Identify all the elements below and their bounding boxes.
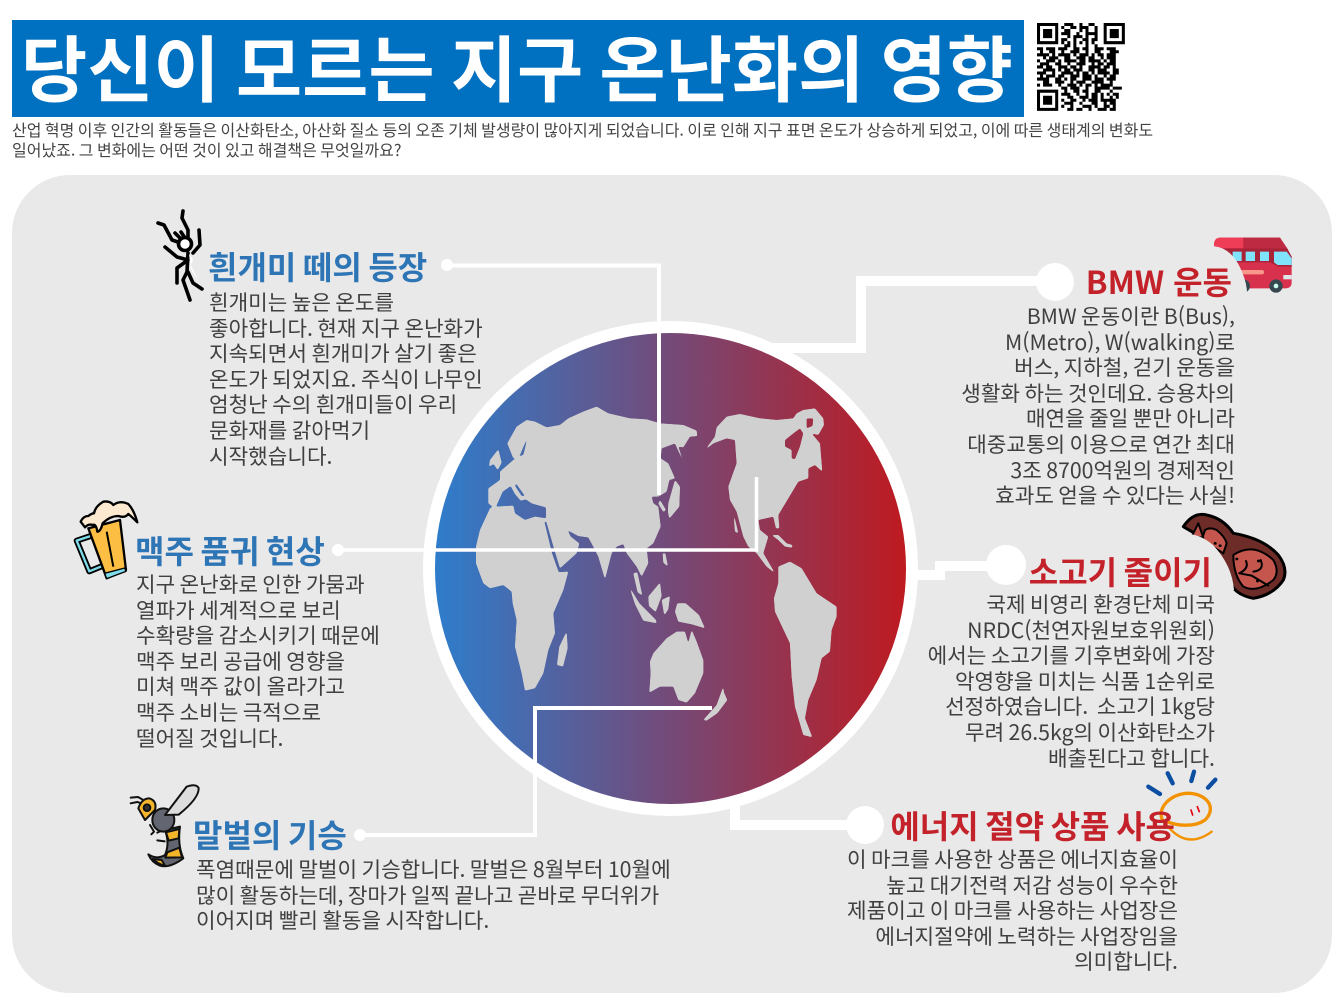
heading: beer: 맥주 품귀 현상 <box>135 527 325 573</box>
connector: hornet <box>354 708 712 841</box>
world map <box>476 407 837 737</box>
connector: beef <box>915 545 1026 585</box>
heading: hornets: 말벌의 기승 <box>193 811 347 857</box>
QR code <box>1037 23 1125 111</box>
heading: energy: 에너지 절약 상품 사용 <box>890 802 1175 848</box>
heading: termites: 흰개미 떼의 등장 <box>208 243 427 289</box>
heading: BMW: BMW 운동 <box>1086 258 1232 304</box>
text: termites: 흰개미는 높은 온도를 좋아합니다. 현재 지구 온난화가 지속되면서 흰개미가 살기 좋은 온도가 되었지요. 주식이 나무인 엄청난 수의 흰개미들이 우리 문화재를 갉아먹기 시작했습니다. <box>209 286 483 471</box>
icon: energy saving mark <box>1148 772 1215 840</box>
connector: beer <box>332 477 756 556</box>
connector: energy <box>735 800 884 844</box>
heading: beef: 소고기 줄이기 <box>1029 548 1212 594</box>
title banner: 당신이 모르는 지구 온난화의 영향 <box>21 12 1013 117</box>
icon: beer mug <box>77 501 137 579</box>
icon: bus <box>1214 238 1292 293</box>
text: hornets: 폭염때문에 말벌이 기승합니다. 말벌은 8월부터 10월에 많이 활동하는데, 장마가 일찍 끝나고 곧바로 무더위가 이어지며 빨리 활동을 시작합니다. <box>196 853 671 935</box>
connector: BMW <box>765 263 1074 348</box>
background panel <box>12 175 1332 993</box>
connector: termite <box>441 259 659 495</box>
text: beef: 국제 비영리 환경단체 미국 NRDC(천연자원보호위원회) 에서는 소고기를 기후변화에 가장 악영향을 미치는 식품 1순위로 선정하였습니다. 소고기 1kg당 무려 26.5kg의 이산화탄소가 배출된다고 합니다. <box>928 588 1215 773</box>
globe <box>423 321 918 816</box>
icon: beef steak <box>1183 514 1285 598</box>
masks over icons <box>1150 246 1247 590</box>
text: beer: 지구 온난화로 인한 가뭄과 열파가 세계적으로 보리 수확량을 감소시키기 때문에 맥주 보리 공급에 영향을 미쳐 맥주 값이 올라가고 맥주 소비는 극적으로 떨어질 것입니다. <box>136 568 380 753</box>
text: BMW: BMW 운동이란 B(Bus), M(Metro), W(walking)로 버스, 지하철, 걷기 운동을 생활화 하는 것인데요. 승용차의 매연을 줄일 뿐만 아니라 대중교통의 이용으로 연간 최대 3조 8700억원의 경제적인 효과도 얻을 수 있다는 사실! <box>961 300 1235 510</box>
icon: termite <box>158 211 202 300</box>
icon: hornet <box>131 785 199 866</box>
text: energy: 이 마크를 사용한 상품은 에너지효율이 높고 대기전력 저감 성능이 우수한 제품이고 이 마크를 사용하는 사업장은 에너지절약에 노력하는 사업장임을 의미합니다. <box>847 843 1178 976</box>
intro text: 산업 혁명 이후 인간의 활동들은 이산화탄소, 아산화 질소 등의 오존 기체 발생량이 많아지게 되었습니다. 이로 인해 지구 표면 온도가 상승하게 되었고, 이에 따른 생태계의 변화도 일어났죠. 그 변화에는 어떤 것이 있고 해결책은 무엇일까요? <box>12 117 1153 161</box>
